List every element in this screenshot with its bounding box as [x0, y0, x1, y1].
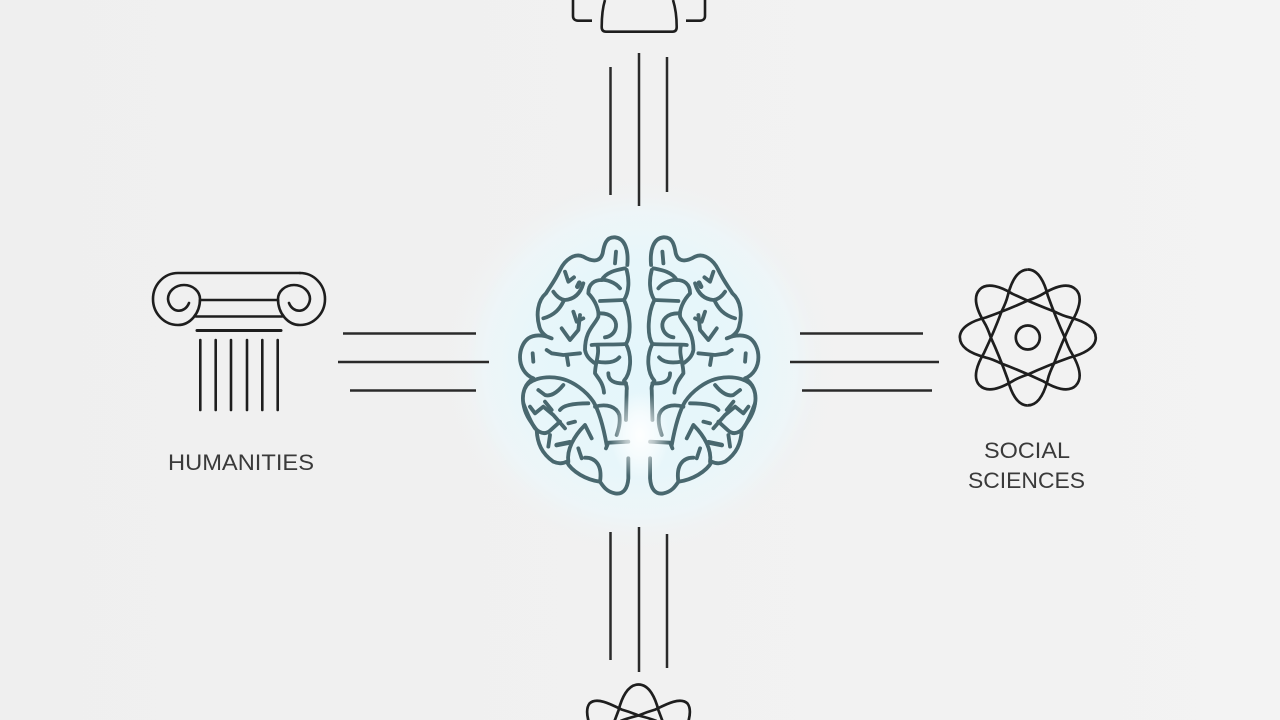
- brain left hemisphere: [520, 237, 630, 494]
- icon: top cropped dome: [573, 0, 705, 32]
- brain right hemisphere: [648, 237, 758, 494]
- icon: brain: [520, 237, 758, 494]
- label: social sciences: [968, 438, 1085, 493]
- brain glow: [445, 175, 835, 555]
- connector lines: left: [338, 334, 489, 390]
- icon: humanities column: [153, 273, 325, 410]
- brain centre light: [610, 391, 670, 479]
- connector lines: bottom: [610, 527, 667, 672]
- connector lines: top: [610, 53, 667, 206]
- icon: bottom cropped atom: [587, 684, 690, 720]
- label: humanities: HUMANITIES: [168, 450, 314, 475]
- label: social sciences: SCIENCES: [968, 468, 1085, 493]
- icon: social sciences atom: [943, 253, 1113, 422]
- label: social sciences: SOCIAL: [984, 438, 1070, 463]
- connector lines: right: [790, 334, 939, 390]
